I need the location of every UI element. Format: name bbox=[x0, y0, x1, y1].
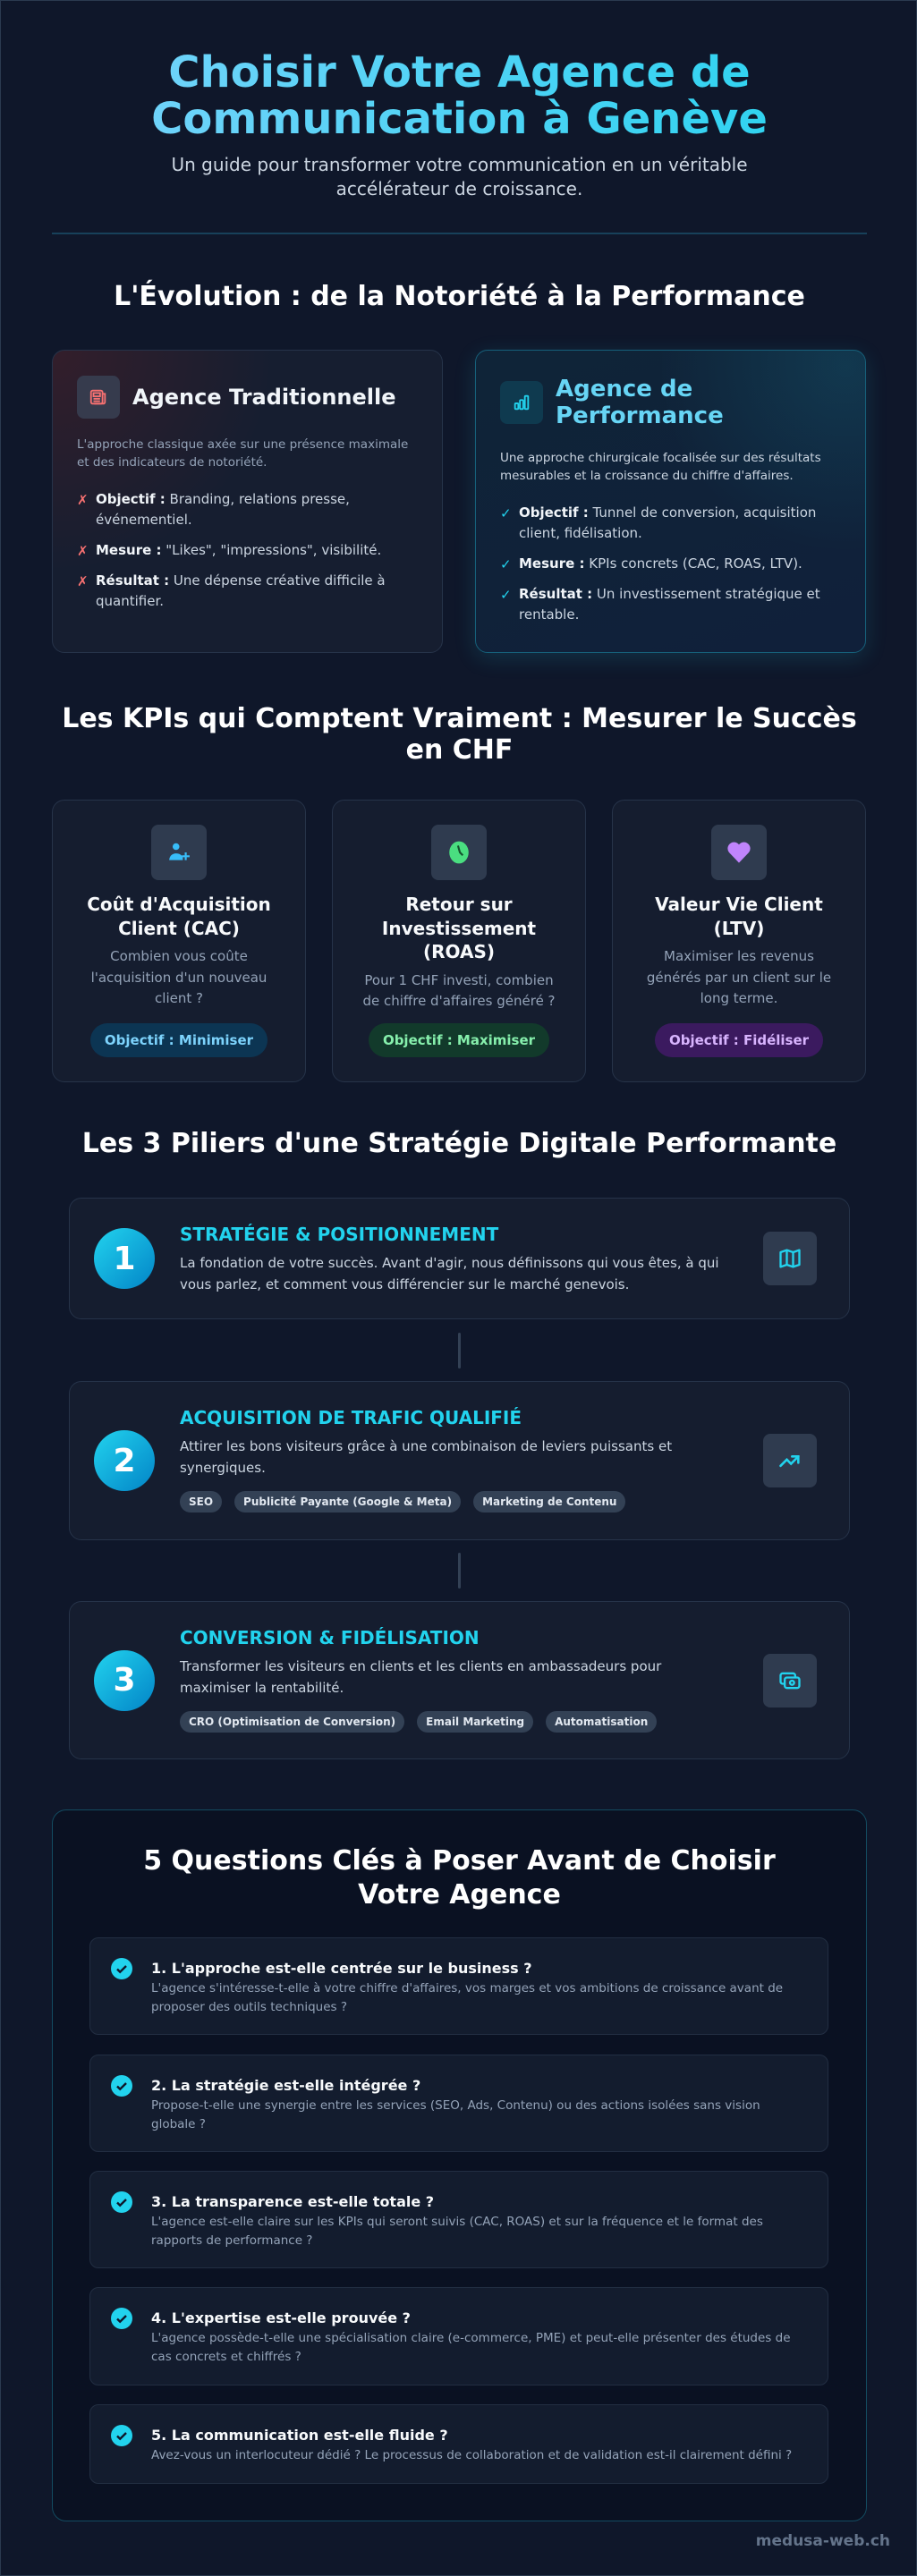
icon: money bbox=[763, 1653, 817, 1707]
bullets performance: Objectif : Tunnel de conversion, acquisition client, fidélisation. bbox=[519, 504, 816, 541]
badge 1 bbox=[94, 1228, 155, 1289]
heading: KPIs bbox=[62, 703, 857, 766]
icon: trending up bbox=[763, 1434, 817, 1487]
header performance: Performance bbox=[556, 402, 724, 429]
bullets performance bbox=[500, 504, 820, 623]
text pilier 3: Transformer les visiteurs en clients et les clients en ambassadeurs pour maximiser la rentabilité. bbox=[180, 1658, 661, 1696]
tags pilier 2: Publicité Payante (Google & Meta) bbox=[243, 1496, 452, 1508]
text pilier 3: CONVERSION & FIDÉLISATION bbox=[180, 1627, 480, 1648]
question 4: L'agence possède-t-elle une spécialisation claire (e-commerce, PME) et peut-elle présenter des études de bbox=[151, 2331, 791, 2345]
question 4: cas concrets et chiffrés ? bbox=[151, 2350, 301, 2364]
bullets traditionnelle: Résultat : Une dépense créative difficile à quantifier. bbox=[96, 572, 386, 609]
bullets traditionnelle: ✗ bbox=[77, 492, 89, 508]
heading: evolution: L'Évolution : de la Notoriété à la Performance bbox=[114, 281, 805, 312]
panel: pilier 1 bbox=[69, 1198, 850, 1319]
question 5: 5. La communication est-elle fluide ? bbox=[151, 2427, 448, 2444]
tags pilier 3 bbox=[180, 1711, 657, 1733]
heading: KPIs: Les KPIs qui Comptent Vraiment : Mesurer le Succès bbox=[62, 703, 857, 734]
panel: 5 questions bbox=[52, 1809, 867, 2521]
text pilier 2: ACQUISITION DE TRAFIC QUALIFIÉ bbox=[180, 1407, 522, 1428]
header traditionnelle: Agence Traditionnelle bbox=[132, 385, 396, 410]
question 2: globale ? bbox=[151, 2117, 206, 2131]
text pilier 3 bbox=[179, 1627, 662, 1733]
title bbox=[1, 49, 917, 142]
question 3: L'agence est-elle claire sur les KPIs qui seront suivis (CAC, ROAS) et sur la fréquence et le format des bbox=[151, 2215, 763, 2229]
panel: pilier 2 bbox=[69, 1381, 850, 1540]
text pilier 2 bbox=[180, 1407, 672, 1513]
panel: KPI CAC: Combien vous coûte l'acquisition d'un nouveau client ? bbox=[91, 948, 267, 1006]
bullets traditionnelle bbox=[77, 491, 386, 609]
pill minimiser: Objectif : Minimiser bbox=[105, 1032, 253, 1048]
desc performance: Une approche chirurgicale focalisée sur des résultats mesurables et la croissance du chiffre d'affaires. bbox=[500, 451, 821, 483]
heading: KPIs: en CHF bbox=[406, 734, 513, 766]
badge 1: 1 bbox=[113, 1240, 136, 1277]
question 4: 4. L'expertise est-elle prouvée ? bbox=[151, 2309, 411, 2326]
pill fidéliser: Objectif : Fidéliser bbox=[669, 1032, 809, 1048]
panel: KPI LTV: Valeur Vie Client (LTV) bbox=[655, 894, 823, 939]
panel: KPI ROAS: Retour sur Investissement (ROAS) bbox=[382, 894, 536, 962]
panel: KPI LTV bbox=[612, 800, 866, 1082]
icon: map bbox=[763, 1232, 817, 1285]
panel: agence traditionnelle bbox=[52, 350, 443, 653]
tags pilier 3: Automatisation bbox=[555, 1716, 648, 1728]
icon: heart bbox=[711, 825, 767, 880]
question 2 bbox=[89, 2055, 828, 2152]
tags pilier 2: Marketing de Contenu bbox=[482, 1496, 616, 1508]
bullets performance: ✓ bbox=[500, 505, 512, 521]
question 2: Propose-t-elle une synergie entre les services (SEO, Ads, Contenu) ou des actions isolées sans vision bbox=[151, 2098, 760, 2113]
icon: bar chart bbox=[500, 381, 543, 424]
bullets traditionnelle: Mesure : "Likes", "impressions", visibilité. bbox=[96, 542, 381, 558]
header traditionnelle bbox=[77, 376, 396, 419]
heading: questions: 5 Questions Clés à Poser Avant de Choisir bbox=[143, 1845, 776, 1877]
bullets performance: Mesure : KPIs concrets (CAC, ROAS, LTV). bbox=[519, 555, 802, 572]
question 3 bbox=[89, 2171, 828, 2268]
question 3: rapports de performance ? bbox=[151, 2233, 312, 2248]
header performance bbox=[500, 376, 724, 429]
title: Choisir Votre Agence de bbox=[168, 47, 751, 97]
panel: agence de performance bbox=[475, 350, 866, 653]
title: Communication à Genève bbox=[151, 94, 768, 144]
pill fidéliser bbox=[655, 1023, 823, 1057]
question 1: L'agence s'intéresse-t-elle à votre chiffre d'affaires, vos marges et vos ambitions de croissance avant de proposer des outils techniques ? bbox=[151, 1981, 783, 2014]
bullets traditionnelle: Objectif : Branding, relations presse, événementiel. bbox=[96, 491, 350, 528]
heading: piliers: Les 3 Piliers d'une Stratégie Digitale Performante bbox=[82, 1128, 836, 1159]
question 1 bbox=[89, 1937, 828, 2035]
badge 3 bbox=[94, 1649, 155, 1710]
question 5: Avez-vous un interlocuteur dédié ? Le processus de collaboration et de validation est-il clairement défini ? bbox=[151, 2448, 792, 2462]
heading: questions: Votre Agence bbox=[358, 1879, 561, 1911]
badge 3: 3 bbox=[113, 1662, 136, 1699]
question 1: 1. L'approche est-elle centrée sur le business ? bbox=[151, 1960, 531, 1977]
panel: pilier 3 bbox=[69, 1601, 850, 1759]
tags pilier 2 bbox=[180, 1491, 625, 1513]
bullets performance: ✓ bbox=[500, 587, 512, 603]
question 3: 3. La transparence est-elle totale ? bbox=[151, 2193, 434, 2210]
pill minimiser bbox=[90, 1023, 267, 1057]
tags pilier 2: SEO bbox=[189, 1496, 213, 1508]
subtitle bbox=[171, 154, 748, 199]
desc traditionnelle: L'approche classique axée sur une présence maximale et des indicateurs de notoriété. bbox=[77, 437, 408, 470]
panel: KPI CAC: Coût d'Acquisition Client (CAC) bbox=[87, 894, 271, 939]
pill maximiser bbox=[369, 1023, 549, 1057]
bullets traditionnelle: ✗ bbox=[77, 543, 89, 559]
bullets performance: ✓ bbox=[500, 556, 512, 572]
icon: user plus bbox=[151, 825, 207, 880]
question 4 bbox=[89, 2287, 828, 2385]
badge 2 bbox=[94, 1430, 155, 1491]
panel: KPI CAC bbox=[52, 800, 306, 1082]
footer: medusa-web.ch bbox=[756, 2532, 890, 2550]
question 5 bbox=[89, 2404, 828, 2484]
question 2: 2. La stratégie est-elle intégrée ? bbox=[151, 2077, 420, 2094]
bullets traditionnelle: ✗ bbox=[77, 573, 89, 589]
text pilier 1: STRATÉGIE & POSITIONNEMENT bbox=[180, 1224, 498, 1245]
badge 2: 2 bbox=[113, 1442, 136, 1479]
tags pilier 3: CRO (Optimisation de Conversion) bbox=[189, 1716, 395, 1728]
subtitle: accélérateur de croissance. bbox=[336, 178, 582, 199]
panel: KPI ROAS: Pour 1 CHF investi, combien de chiffre d'affaires généré ? bbox=[362, 971, 556, 1009]
icon: newspaper bbox=[77, 376, 120, 419]
heading: questions bbox=[143, 1845, 776, 1911]
text pilier 1 bbox=[180, 1224, 719, 1292]
panel: KPI LTV: Maximiser les revenus générés par un client sur le long terme. bbox=[647, 948, 831, 1006]
icon: clock bbox=[431, 825, 487, 880]
subtitle: Un guide pour transformer votre communication en un véritable bbox=[171, 154, 748, 175]
text pilier 1: La fondation de votre succès. Avant d'agir, nous définissons qui vous êtes, à qui vous parlez, et comment vous différencier sur le marché genevois. bbox=[180, 1255, 719, 1292]
panel: KPI ROAS bbox=[332, 800, 586, 1082]
tags pilier 3: Email Marketing bbox=[426, 1716, 524, 1728]
text pilier 2: Attirer les bons visiteurs grâce à une combinaison de leviers puissants et synergiques. bbox=[180, 1438, 672, 1476]
pill maximiser: Objectif : Maximiser bbox=[383, 1032, 535, 1048]
header performance: Agence de bbox=[556, 376, 692, 402]
bullets performance: Résultat : Un investissement stratégique et rentable. bbox=[519, 586, 820, 623]
